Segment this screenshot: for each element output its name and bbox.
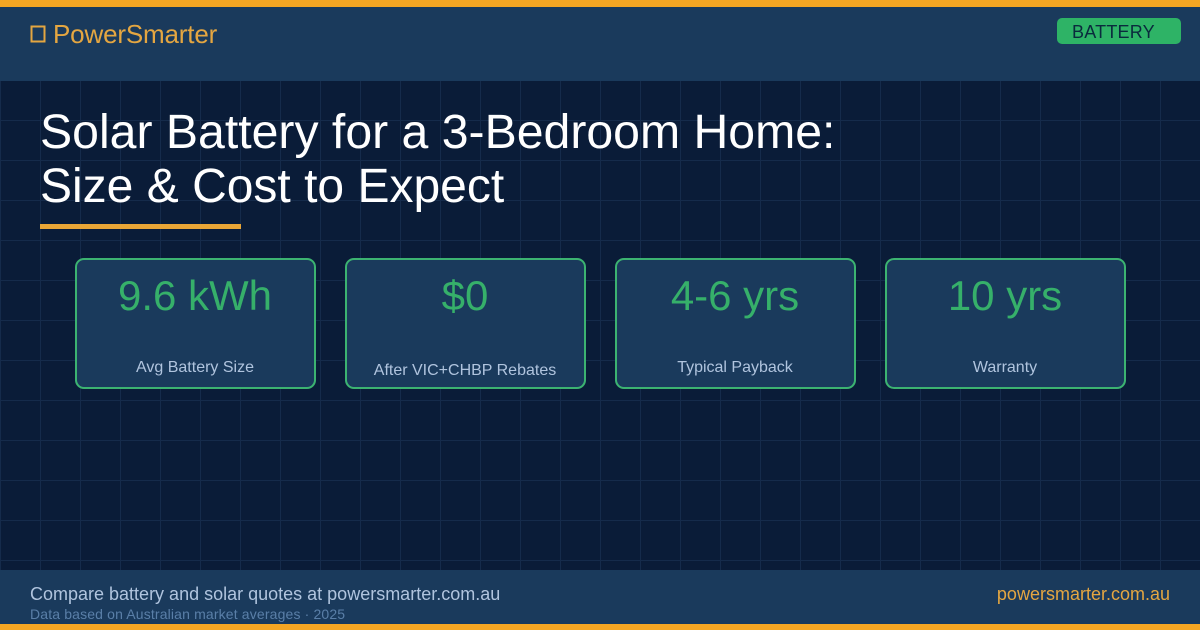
footer call to action: Compare battery and solar quotes at powersmarter.com.au: [30, 584, 500, 604]
footer: [0, 570, 1200, 630]
stat cards: [76, 259, 1125, 388]
category badge: BATTERY: [1072, 22, 1155, 42]
card: warranty: [886, 259, 1125, 388]
card: payback: Typical Payback: [677, 359, 794, 376]
category badge: [1057, 18, 1181, 44]
title underline: [40, 224, 241, 229]
card: battery size: [76, 259, 315, 388]
card: rebates: After VIC+CHBP Rebates: [374, 362, 556, 379]
card: rebates: $0: [442, 272, 488, 319]
card: battery size: Avg Battery Size: [136, 359, 254, 376]
title: Solar Battery for a 3-Bedroom Home:: [40, 105, 835, 159]
card: payback: 4-6 yrs: [671, 272, 799, 319]
card: battery size: 9.6 kWh: [118, 272, 272, 319]
title: [40, 105, 835, 213]
icon: missing glyph box: [32, 26, 44, 42]
brand name: PowerSmarter: [53, 19, 218, 49]
logo: [32, 19, 218, 49]
footer url: powersmarter.com.au: [997, 584, 1170, 604]
title: Size & Cost to Expect: [40, 160, 504, 213]
card: payback: [616, 259, 855, 388]
card: warranty: Warranty: [973, 359, 1037, 376]
footer data note: Data based on Australian market averages · 2025: [30, 606, 345, 622]
card: warranty: 10 yrs: [948, 272, 1062, 319]
card: rebates: [346, 259, 585, 388]
header bar: [0, 0, 1200, 81]
